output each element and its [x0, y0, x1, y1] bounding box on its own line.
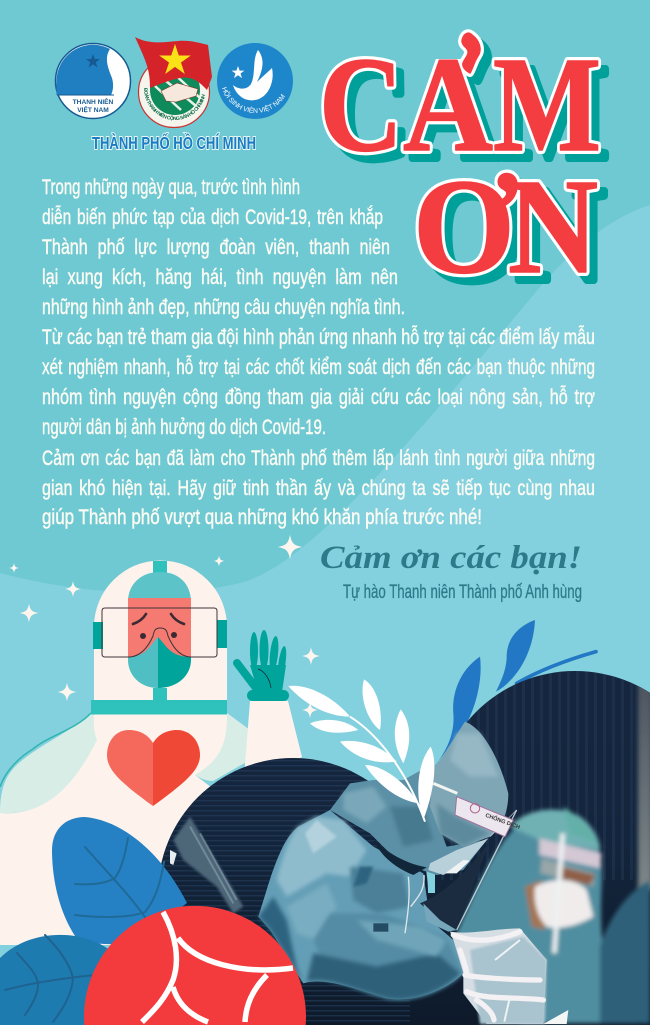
photo: medical workers in protective suits [170, 722, 650, 1024]
left shield fragment [170, 817, 243, 913]
dark neck crease [373, 838, 427, 875]
logo: Hội Sinh viên Việt Nam: HỘI SINH VIÊN VIỆT NAM [222, 86, 285, 113]
small blue leaf [0, 935, 120, 1025]
visor [128, 572, 191, 688]
title outline [319, 30, 601, 302]
cape [330, 763, 487, 875]
body text: những hình ảnh đẹp, những câu chuyện nghĩa tình. [42, 296, 405, 319]
suit torso and arm [258, 810, 463, 999]
title outline: C [319, 30, 403, 180]
title letters: C [319, 30, 403, 180]
title letters: N [508, 152, 598, 302]
rear worker, out of focus [453, 807, 650, 1023]
body text: người dân bị ảnh hưởng do dịch Covid-19. [42, 416, 326, 439]
forearm [313, 913, 463, 999]
thank you tagline: Cảm ơn các bạn! [320, 540, 582, 576]
goggles [102, 608, 217, 657]
title letters [324, 32, 598, 274]
title shadow: Ả [411, 38, 501, 188]
health worker illustration [0, 560, 302, 945]
body text: Thành phố lực lượng đoàn viên, thanh niên [42, 236, 390, 259]
title shadow: Ơ [421, 160, 525, 310]
title outline: N [508, 152, 598, 302]
title letters: Ơ [413, 152, 517, 302]
hood [430, 722, 508, 847]
head strap [433, 783, 457, 793]
face [133, 614, 184, 639]
blurred wall [638, 680, 650, 890]
shoulder light panel [277, 817, 367, 897]
body text: giúp Thành phố vượt qua những khó khăn phía trước nhé! [42, 506, 482, 529]
city name: THÀNH PHỐ HỒ CHÍ MINH [92, 132, 256, 153]
blue leaves behind photo [437, 620, 596, 763]
main worker [258, 722, 568, 1024]
name badge [455, 797, 521, 837]
logo: Đoàn Thanh niên Cộng sản Hồ Chí Minh [135, 37, 212, 128]
logo: Thanh Niên Việt Nam [56, 44, 130, 118]
title outline: Ả [403, 30, 493, 180]
body text: diễn biến phức tạp của dịch Covid-19, trên khắp [42, 206, 383, 229]
large blue leaf [52, 817, 187, 945]
sparkles [9, 534, 320, 718]
logo: Thanh Niên Việt Nam: THANH NIÊN [73, 97, 114, 106]
title letters: M [493, 30, 601, 180]
name badge: CHỐNG DỊCH [484, 812, 521, 831]
title shadow: M [501, 38, 609, 188]
suit body [0, 560, 227, 945]
thank you tagline [320, 540, 582, 603]
face shield [420, 840, 490, 930]
waving arm [243, 701, 302, 790]
body text [42, 176, 595, 529]
red circle [84, 906, 306, 1025]
mint shoulders [0, 713, 250, 813]
left sleeve shadow [258, 897, 303, 983]
title outline: Ơ [413, 152, 517, 302]
gloves and bag [450, 928, 568, 1024]
logo: Hội Sinh viên Việt Nam [217, 43, 293, 119]
leaves and red circle [0, 817, 306, 1025]
upper arm highlight [287, 883, 337, 940]
logos [54, 37, 293, 153]
zipper [405, 875, 424, 933]
title shadow: C [327, 38, 411, 188]
title letters: Ả [403, 30, 493, 180]
chest panel [423, 903, 457, 932]
straps and collar [91, 561, 227, 714]
heart [107, 730, 200, 806]
logo: Thanh Niên Việt Nam: VIỆT NAM [77, 105, 109, 114]
title outline: M [493, 30, 601, 180]
photo: dark backdrop [150, 660, 650, 1025]
white sprig [288, 679, 434, 822]
elastic hem [428, 838, 488, 875]
logo: Đoàn Thanh niên Cộng sản Hồ Chí Minh: ĐOÀN THANH NIÊN CỘNG SẢN HỒ CHÍ MINH [144, 88, 206, 121]
body text: lại xung kích, hăng hái, tình nguyện làm nên [42, 266, 398, 289]
body text: Trong những ngày qua, trước tình hình [42, 176, 300, 199]
title: CẢM ƠN [319, 30, 609, 310]
chest shade [350, 867, 410, 913]
glove [237, 630, 289, 701]
title shadow [338, 38, 610, 286]
title shadow: N [516, 160, 606, 310]
